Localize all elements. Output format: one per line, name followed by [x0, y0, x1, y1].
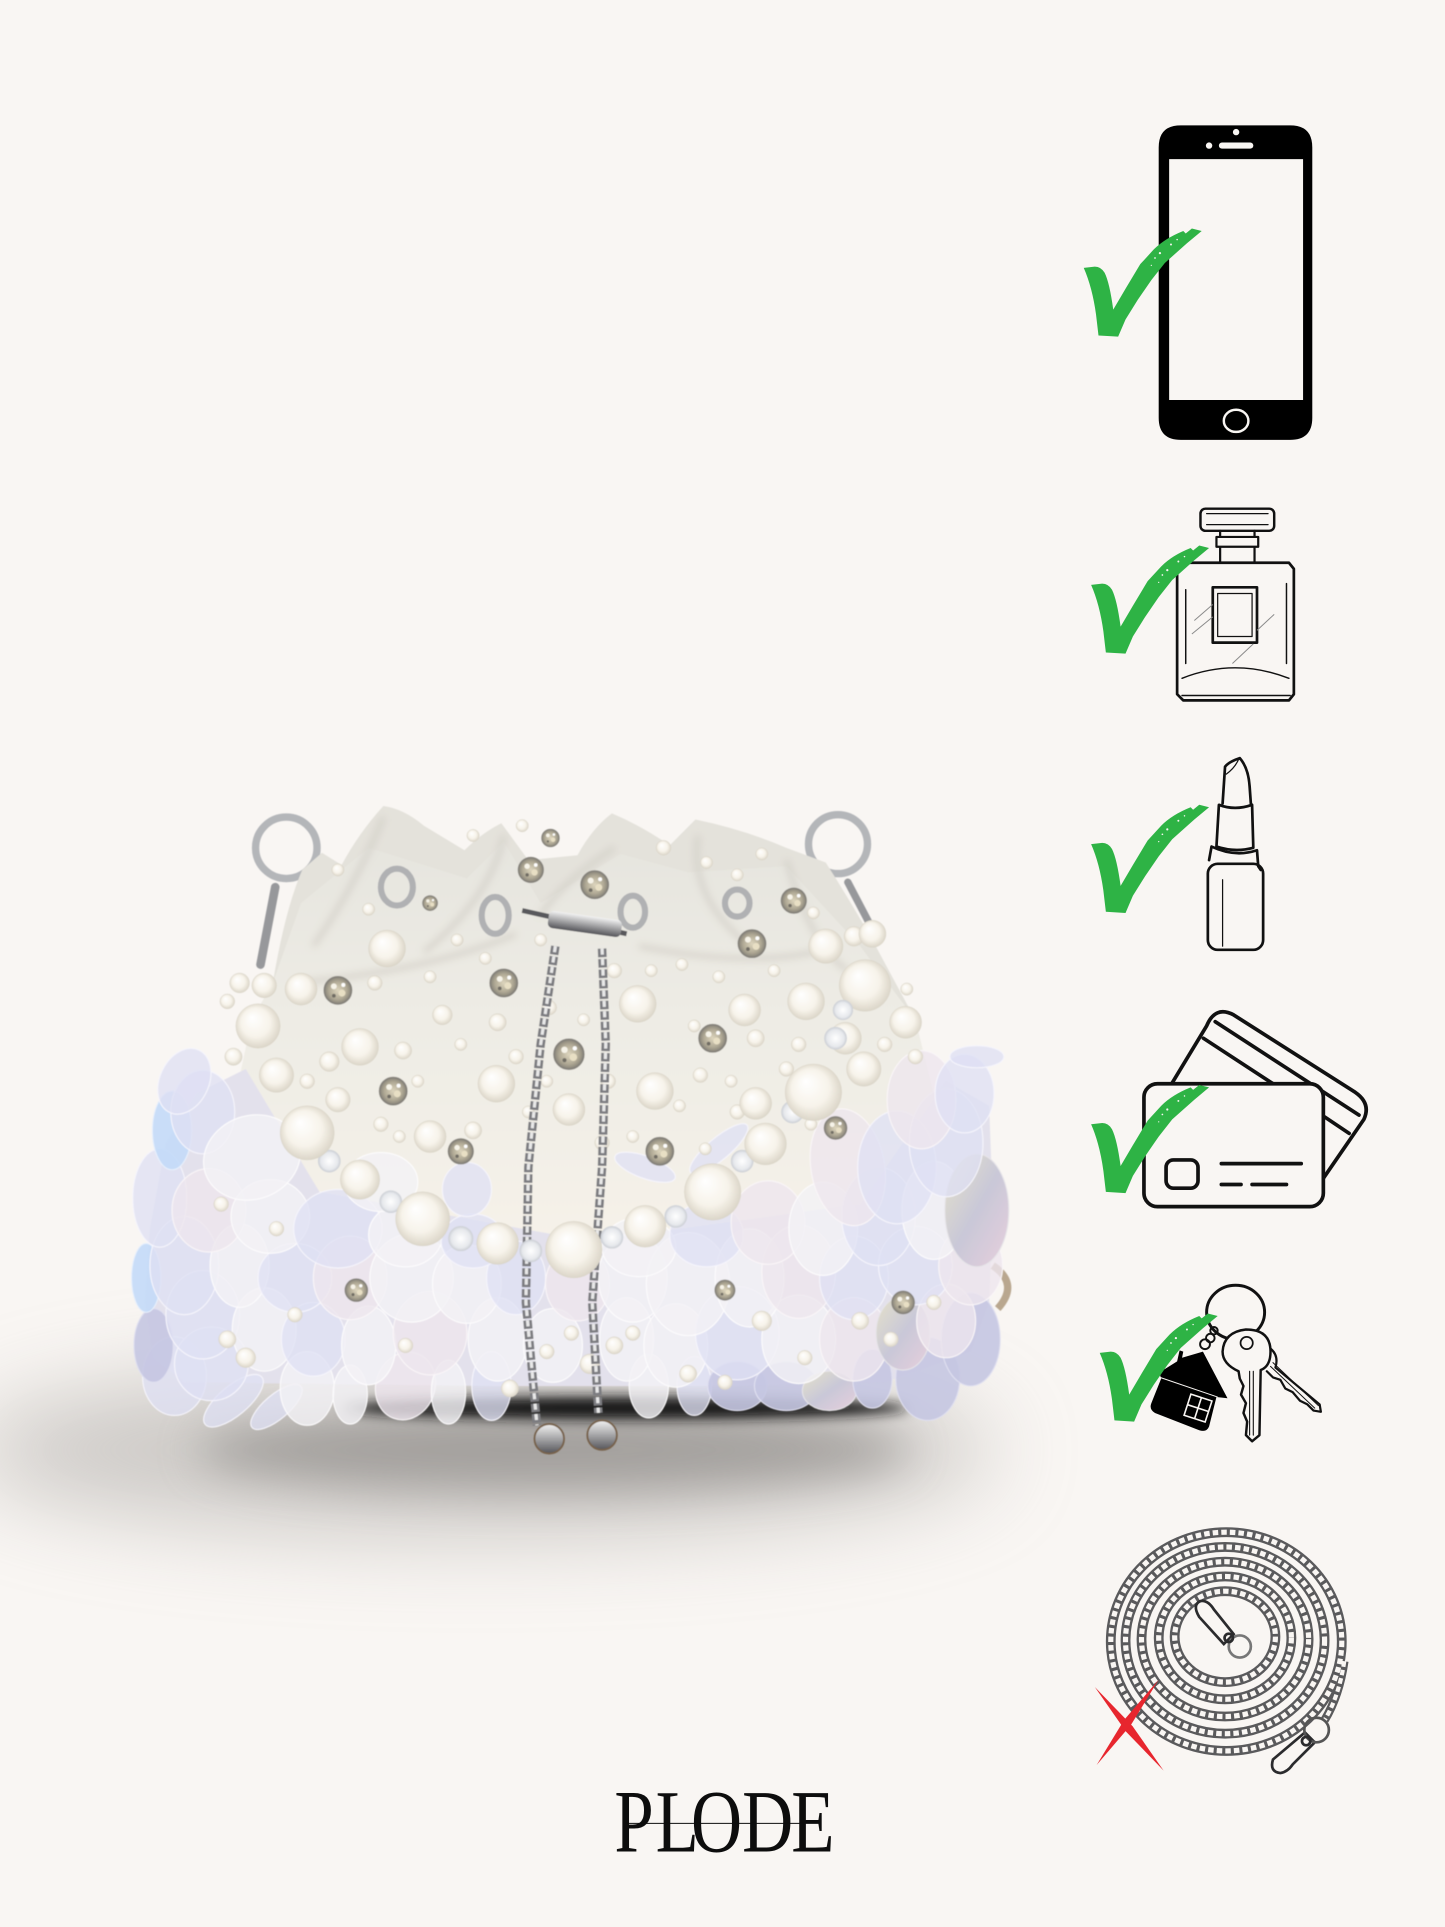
green check [1091, 1085, 1209, 1193]
icon: house keys with green check [1100, 1285, 1321, 1441]
drawstring clasp and chains [522, 910, 627, 1454]
outer lobster clasp [1272, 1718, 1329, 1773]
sequins lower body [131, 1040, 1009, 1437]
scattered small pearls [214, 820, 941, 1397]
lipstick [1208, 758, 1263, 950]
icon: smartphone with green check [1084, 125, 1312, 440]
green check [1091, 805, 1209, 913]
rhinestones [324, 829, 914, 1314]
house key fob [1151, 1327, 1228, 1431]
chain coil [1111, 1532, 1344, 1751]
brand logo: PLODE: PLODE [614, 1774, 835, 1872]
icon: lipstick with green check [1091, 758, 1263, 950]
side metal rings and clips [256, 815, 1008, 1309]
green check [1091, 546, 1209, 654]
green check [1084, 229, 1202, 337]
green check [1100, 1314, 1218, 1422]
icon: bank cards with green check [1091, 1012, 1366, 1207]
pearl and crystal necklace strand [280, 1000, 853, 1278]
bottle [1177, 509, 1294, 700]
inner lobster clasp [1196, 1601, 1251, 1658]
bag fabric upper [233, 806, 936, 1247]
product photo: sequinned pearl bucket bag [131, 806, 1009, 1454]
cards [1144, 1012, 1366, 1207]
red cross [1095, 1680, 1164, 1771]
icon: perfume bottle with green check [1091, 509, 1294, 700]
icon: long chain strap with red cross [1095, 1532, 1344, 1773]
keys [1207, 1285, 1321, 1441]
bag shadow [0, 1364, 995, 1536]
larger pearls on fabric [230, 920, 922, 1153]
phone [1159, 125, 1312, 440]
eyelets [381, 869, 750, 934]
